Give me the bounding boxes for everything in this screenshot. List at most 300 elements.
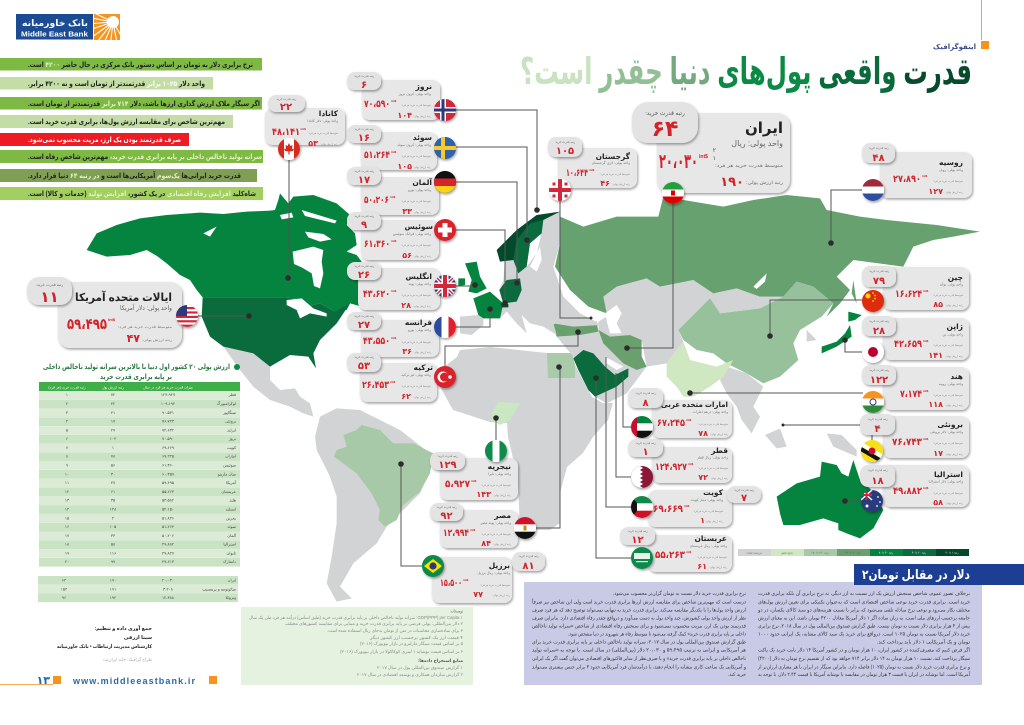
card: Germany: رتبه ارزش پولی: [413, 211, 432, 214]
table title [43, 363, 240, 381]
card: UAE: int$ [686, 418, 692, 422]
table: top 20 countries: ۱۸ [65, 542, 70, 547]
table: top 20 countries: ۵۲،۱۵۰ [162, 506, 174, 512]
card: Brunei: رتبه قدرت خرید: [867, 417, 888, 421]
map legend: بررسی نشده [746, 550, 762, 554]
card: Qatar: ۷۲ [698, 473, 708, 482]
table: top 20 countries: ایرلند [227, 427, 236, 432]
card: Kuwait [631, 486, 761, 527]
table: top 20 countries: ۵۳،۵۸۲ [162, 498, 174, 503]
table: lower ranks: ۱۵۴ [61, 586, 67, 591]
card: Norway: ۷۰،۵۹۰ [364, 99, 390, 110]
table: lower ranks: ۳،۲۰۸ [163, 586, 174, 591]
card: Kuwait: واحد پولی: دینار کویت [691, 498, 723, 502]
card: Brazil: رتبه قدرت خرید: [518, 554, 539, 558]
card: Georgia: ۴۶ [600, 179, 610, 188]
table: top 20 countries: ۳۰ [111, 471, 115, 476]
card: Russia: ۲۷،۸۹۰ [893, 174, 921, 185]
card: Canada: کانادا [319, 109, 339, 118]
card: Kuwait: ۷ [741, 493, 747, 504]
card: Japan [862, 316, 969, 363]
card: Norway: رتبه ارزش پولی: [413, 115, 432, 118]
card: Turkey: ۶۲ [401, 392, 411, 401]
card: Iran [632, 102, 790, 204]
card: Qatar: واحد پولی: ریال قطر [696, 456, 728, 460]
table: lower ranks: ونزوئلا [225, 595, 236, 600]
card: United Kingdom: ۴۳،۶۲۰ [363, 289, 390, 300]
logo: Middle East Bank [16, 10, 126, 48]
table: top 20 countries: ۱۰ [65, 471, 69, 476]
flag: United Kingdom [434, 275, 456, 297]
table: top 20 countries: ۳۵ [111, 498, 115, 503]
card: Egypt: رتبه ارزش پولی: [493, 543, 512, 546]
card: Canada: واحد پولی: دلار کانادا [307, 119, 338, 123]
card: Russia: متوسط قدرت خرید هر فرد: [933, 180, 964, 183]
map: Asia and Europe [552, 195, 980, 538]
text column: left: خرید کند. [728, 672, 746, 678]
table: top 20 countries: رتبه ارزش پول [102, 386, 124, 390]
card: Kuwait: رتبه قدرت خرید: [734, 488, 755, 492]
credits: طراح گرافیک: خانه ایران‌نت [103, 656, 152, 662]
card: Nigeria: متوسط قدرت خرید هر فرد: [481, 484, 512, 487]
card: Egypt [430, 503, 536, 548]
card: Georgia: واحد پولی: لاری گرجستان [592, 160, 630, 165]
card: Egypt: متوسط قدرت خرید هر فرد: [481, 533, 512, 536]
table: top 20 countries: ۵۸ [111, 542, 116, 547]
card: Iran: ۱ [713, 156, 716, 162]
card: Sweden [347, 125, 456, 171]
card: Iran: ۲ [713, 148, 716, 154]
table: top 20 countries: هلند [229, 498, 236, 503]
card: Australia: int$ [923, 486, 929, 490]
card: Sweden: متوسط قدرت خرید هر فرد: [401, 155, 432, 158]
card: United Kingdom: واحد پولی: پوند [408, 282, 431, 286]
card: Norway: رتبه قدرت خرید: [354, 74, 375, 78]
map: Egypt [547, 353, 575, 378]
map legend: رتبه ۸۰ تا ۱۲۰ [845, 550, 862, 554]
card: China: ۷۹ [873, 276, 885, 287]
table: top 20 countries: ۱۲۴،۹۲۷ [161, 392, 176, 397]
card: India: هند [950, 372, 963, 381]
text column: right: جامعه برحسب ارزهای ملی است. به زبان ساده اگر ۱ دلار آمریکا معادل ۴۲۰۰ تومان باشد، این به معنای ارزش [758, 614, 970, 622]
card: China: int$ [923, 289, 929, 293]
card: Brunei [860, 414, 969, 462]
card: Saudi Arabia: رتبه قدرت خرید: [627, 529, 648, 533]
card: Norway: نروژ [415, 82, 432, 91]
card: UAE: رتبه ارزش پولی: [710, 433, 729, 436]
card: United Kingdom: متوسط قدرت خرید هر فرد: [401, 294, 432, 297]
table: top 20 countries: سنگاپور [222, 410, 237, 415]
card: China: واحد پولی: یوآن [940, 282, 963, 286]
card: India: رتبه ارزش پولی: [945, 404, 964, 407]
text column: left [531, 590, 747, 678]
card: Brunei: متوسط قدرت خرید هر فرد: [933, 442, 964, 445]
table: top 20 countries: ۵ [66, 427, 68, 432]
logo: Middle East Bank: بانک خاورمیانه [22, 18, 88, 29]
card: Russia: رتبه ارزش پولی: [945, 191, 964, 194]
credits: کارشناس مدیریت ارتباطات • بانک خاورمیانه [57, 644, 152, 650]
card: United States: رتبه ارزش پولی: [142, 338, 172, 342]
card: United Kingdom: ۲۶ [358, 270, 370, 281]
card: Switzerland: رتبه ارزش پولی: [413, 255, 432, 258]
card: Japan: رتبه قدرت خرید: [869, 319, 890, 323]
card: Brunei: رتبه ارزش پولی: [945, 453, 964, 456]
card: Egypt: int$ [470, 528, 476, 532]
table: top 20 countries: سان مارینو [217, 471, 237, 476]
card: Switzerland: ۶۱،۳۶۰ [364, 239, 390, 250]
card: Brazil: برزیل [489, 561, 510, 570]
notes panel: ۴ قیمت ارز یک کشور برحسب ارز کشور دیگر [369, 635, 464, 640]
card: Saudi Arabia: int$ [686, 550, 692, 554]
card: Brunei: ۱۷ [933, 449, 943, 458]
table: top 20 countries: سوئد [227, 524, 237, 529]
flag: Nigeria [485, 440, 507, 462]
card: United States: واحد پولی: دلار آمریکا [120, 303, 172, 312]
table: lower ranks: ۹۶ [62, 595, 66, 600]
card: Germany: رتبه قدرت خرید: [354, 169, 375, 173]
text column: right: خرید دلار آمریکا نسبت به تومان ۱۰۲۵ است. درواقع برای خرید یک سبد کالای مشابه، یک ایرانی حدود ۱۰۰۰ [758, 630, 970, 638]
card: Canada [265, 95, 345, 160]
card: Saudi Arabia [620, 527, 732, 572]
card: Russia: ۴۸ [872, 153, 885, 164]
text column: left: قدرتمند بودن یک ارز، مزیت محسوب نمی‌شود و برای سنجش رفاه اقتصادی از شاخص «سرانه تولید ناخالص [532, 624, 747, 630]
table: top 20 countries: برونئی [225, 419, 236, 424]
card: Nigeria: واحد پولی: نایرا [488, 472, 511, 476]
connector lines [187, 110, 873, 566]
key messages bars: مهم‌ترین شاخص برای مقایسه ارزش پول‌ها، برابری قدرت خرید است. [28, 119, 225, 126]
text column: left: نرخ برابری قدرت خرید دلار نسبت به تومان گران‌تر محسوب می‌شود. [613, 590, 746, 597]
map: Africa [438, 347, 613, 530]
card: India: واحد پولی: روپیه [939, 382, 963, 386]
table: top 20 countries: ۵۹،۴۹۵ [162, 480, 174, 485]
card: Saudi Arabia: عربستان [694, 534, 727, 543]
decorative top rule [981, 0, 982, 40]
card: Japan: رتبه ارزش پولی: [945, 355, 964, 358]
table: top 20 countries: لوکزامبورگ [217, 401, 236, 406]
logo: Middle East Bank: Middle East Bank [21, 32, 88, 38]
card: Russia: واحد پولی: روبل [939, 168, 963, 172]
text column: left: داخلی بر پایه برابری قدرت خرید» کمک گرفته می‌شود تا متوسط رفاه هر شهروند در دنیا مشخص شود. [568, 630, 746, 638]
card: Qatar: ۱۲۴،۹۲۷ [655, 462, 687, 473]
flag: Switzerland [434, 219, 456, 241]
flag: Turkey [434, 366, 456, 388]
table: top 20 countries: ۷۸ [111, 454, 116, 459]
card: Germany [347, 167, 456, 216]
card: Saudi Arabia: واحد پولی: ریال عربستان [690, 544, 727, 548]
card: Australia: استرالیا [934, 470, 963, 479]
notes panel [241, 607, 473, 685]
card: United Kingdom: رتبه ارزش پولی: [413, 305, 432, 308]
text column: left: نظر از ارزش واحد پولی کشورش، چند واحد پول به دست می‌آورد و درواقع چقدر رفاه اقتصادی دارد. بنابراین صرف [532, 614, 746, 622]
table: top 20 countries: ۴۲ [111, 401, 115, 406]
text column: right: و نرخ برابری قدرت خرید دلار نسبت به تومان (۱۰۲۵) فاصله دارد. بنابراین سیگار در ایران با هر معیاری ارزان‌تر از [757, 664, 971, 670]
card: China: متوسط قدرت خرید هر فرد: [933, 294, 964, 297]
table: top 20 countries: ۶۹،۶۶۹ [162, 445, 174, 450]
table: top 20 countries: نروژ [228, 436, 236, 441]
card: Egypt: ۹۲ [440, 511, 453, 522]
card: Brunei: برونئی [937, 420, 963, 429]
text column: right: برخلاف تصور عموم، شاخص سنجش ارزش یک ارز نسبت به ارز دیگر، نه نرخ برابری آن بلکه برابری قدرت [758, 590, 970, 597]
card: Sweden: واحد پولی: کرون سوئد [397, 143, 431, 147]
card: Norway: متوسط قدرت خرید هر فرد: [401, 104, 432, 107]
table: top 20 countries: ۳۳ [111, 533, 116, 538]
card: Japan: int$ [923, 339, 929, 343]
card: Sweden: ۱۰۵ [397, 162, 412, 171]
card: India [862, 365, 969, 414]
table: top 20 countries: ۷۲ [111, 392, 115, 397]
card: China: چین [948, 273, 963, 282]
table: lower ranks [38, 576, 238, 602]
table: top 20 countries: ۷۰،۵۹۰ [162, 436, 174, 441]
table: top 20 countries: ۴۷ [111, 480, 116, 485]
card: France: ۳۶ [402, 347, 412, 356]
card: UAE: ۸ [642, 398, 649, 409]
table: lower ranks: ۶۴ [62, 578, 66, 582]
footer [0, 675, 217, 687]
card: Russia: روسیه [939, 158, 963, 167]
card: Nigeria: رتبه قدرت خرید: [437, 454, 458, 458]
table: top 20 countries: کویت [227, 445, 236, 450]
card: Germany: ۳۳ [402, 207, 412, 216]
table: top 20 countries: ۲ [66, 401, 68, 406]
key messages bars [0, 58, 263, 200]
card: Turkey: ۵۳ [358, 361, 370, 372]
notes panel: ۳ برای ساده‌سازی محاسبات در متن از تومان به‌جای ریال استفاده شده است. [327, 628, 464, 633]
card: UAE: واحد پولی: درهم امارات [692, 410, 728, 414]
text column: right: مختلف بکار می‌رود و نوعی نرخ مبادله تلقی می‌شود که برابر با نسبت هزینه‌های دو سبد کالای یکسان، در دو [757, 608, 970, 614]
card: UAE: رتبه قدرت خرید: [635, 391, 656, 395]
key messages bars: نرخ برابری دلار به تومان بر اساس دستور بانک مرکزی در حال حاضر ۴۲۰۰ است. [28, 61, 253, 69]
card: Sweden: سوئد [413, 133, 432, 142]
card: Georgia: int$ [589, 168, 595, 172]
card: Egypt: ۱۲،۹۹۴ [443, 528, 469, 539]
table: top 20 countries: رتبه قدرت خرید (هر فرد) [48, 386, 86, 390]
card: Brazil: ۱۵،۵۰۰ [440, 578, 462, 589]
card: Sweden: رتبه ارزش پولی: [413, 166, 432, 169]
table: top 20 countries: ۵۶ [111, 462, 115, 468]
table: top 20 countries: ۴۹،۶۱۳ [162, 559, 175, 564]
flag: Japan [862, 341, 884, 363]
table: top 20 countries: ۶ [66, 436, 68, 441]
text column: right: سیگار پرداخت کند، نسبت ۱۰ هزار تومان به ۱۴ دلار برابر ۷۱۴ خواهد بود که از تقسیم نرخ تومان به دلار (۴۲۰۰) [758, 655, 970, 662]
table: top 20 countries: ۶۱،۳۶۰ [162, 462, 174, 468]
flag: Iran [662, 182, 684, 204]
card: Australia: ۵۸ [933, 498, 943, 507]
table: lower ranks: سائوتومه و پرینسیپ [202, 586, 237, 591]
flag: Kuwait [631, 496, 653, 518]
card: UAE: ۷۸ [698, 429, 708, 438]
card: Norway: ۱۰۴ [397, 111, 412, 120]
card: Iran: int$ [699, 154, 708, 160]
table: top 20 countries: ۵۰،۲۰۶ [162, 533, 174, 538]
panel heading: دلار در مقابل تومان۲ [862, 567, 970, 582]
text column: right [757, 590, 971, 678]
table: top 20 countries: ۱۴۸ [110, 506, 117, 512]
table: top 20 countries: عربستان [221, 489, 236, 494]
card: Germany: ۵۰،۲۰۶ [364, 195, 389, 206]
card: United Kingdom: ۲۸ [401, 301, 411, 310]
table: top 20 countries: ۱۳ [65, 498, 70, 503]
table: top 20 countries: ۵۱،۲۶۴ [162, 524, 174, 529]
table: top 20 countries: میزان قدرت خرید هر فرد در سال [143, 386, 193, 390]
text column: right: اگر فرض کنیم که مصرف‌کننده در کشور ایران، ۱۰ هزار تومان و در کشور آمریکا ۱۴ دلار بابت خرید یک پاکت [758, 646, 970, 654]
card: Switzerland: متوسط قدرت خرید هر فرد: [401, 244, 432, 247]
card: Qatar: int$ [688, 462, 694, 466]
card: Nigeria [430, 440, 518, 500]
flag: Qatar [631, 466, 653, 488]
notes panel: ۲ دلار بین‌المللی: پولی فرضی بر پایه برابری قدرت خرید و مبنایی برای مقایسه کشورهای مختلف [285, 621, 464, 626]
flag: Australia [861, 490, 883, 512]
table: top 20 countries: ۲۷ [111, 427, 116, 432]
table title: بر پایه برابری قدرت خرید [100, 374, 172, 381]
table: top 20 countries: ۱۷ [111, 419, 116, 424]
table: lower ranks: ۱۲،۳۸۸ [162, 595, 175, 600]
card: Turkey: متوسط قدرت خرید هر فرد: [401, 385, 432, 388]
table: top 20 countries: ۹ [66, 462, 68, 468]
card: Georgia: ۱۰۵ [556, 146, 574, 157]
card: Brazil: ۷۷ [473, 590, 483, 599]
card: Canada: ۴۸،۱۴۱ [272, 127, 300, 138]
text column: left: ارزش واحد پول‌ها را با یکدیگر مقایسه می‌کند. برابری قدرت خرید به تنهایی نمی‌تواند توضیح دهد که هر فرد صرف [532, 606, 746, 614]
card: France: واحد پولی: یورو [407, 328, 431, 332]
card: Switzerland: ۹ [361, 220, 367, 231]
card: Japan: ژاپن [947, 322, 963, 331]
flag: Canada [278, 138, 300, 160]
card: Saudi Arabia: ۱۲ [631, 535, 644, 546]
text column: right: آمریکا است. اما نوشابه در ایران با قیمت ۳ هزار تومان در مقایسه با نوشابه آمریکا با قیمت ۲.۴۴ دلار، با توجه به [758, 671, 971, 678]
card: Turkey: ۲۶،۴۵۳ [362, 380, 389, 391]
card: Japan: ۱۴۱ [928, 351, 943, 360]
card: France: فرانسه [405, 318, 432, 327]
card: Norway: واحد پولی: کرون نروژ [398, 92, 431, 96]
map: Nigeria [492, 402, 520, 425]
table: top 20 countries: استرالیا [223, 542, 236, 547]
card: Switzerland: واحد پولی: فرانک سوئیس [393, 232, 431, 236]
card: Egypt: مصر [493, 511, 511, 520]
text column: right: خرید است. برابری قدرت خرید نوعی شاخص اقتصادی است که به‌عنوان تکنیکی برای تعیین ارزش پول‌های [758, 600, 970, 606]
card: Kuwait: متوسط قدرت خرید هر فرد: [693, 510, 724, 513]
key messages bars: شاه‌کلید افزایش رفاه اقتصادی در یک کشور، افزایش تولید (خدمات و کالا) است. [28, 190, 256, 198]
table: top 20 countries: ۷ [66, 445, 69, 450]
flag: Brunei [861, 440, 883, 462]
card: Sweden: ۵۱،۲۶۴ [364, 150, 390, 161]
card: India: ۱۱۸ [928, 400, 943, 409]
text column: left: و آمریکایی یک ساعت کاری مشابه را انجام دهند، با درآمدشان فرد آمریکایی حدود ۳ برابر جنس بیشتری می‌تواند [532, 664, 747, 670]
card: Georgia: رتبه ارزش پولی: [612, 183, 631, 186]
card: Switzerland: رتبه قدرت خرید: [354, 214, 375, 218]
card: Canada: ۵۳ [308, 139, 318, 148]
card: United Kingdom: رتبه قدرت خرید: [354, 264, 375, 268]
card: Nigeria: ۱۴۳ [476, 490, 491, 499]
card: Germany: متوسط قدرت خرید هر فرد: [401, 200, 432, 203]
flag: India [862, 391, 884, 414]
table: top 20 countries: بحرین [226, 515, 236, 520]
text column: right: بیش از ۴ هزار برابری دلار نسبت به تومان نیست. طبق گزارش صندوق بین‌المللی پول در سال ۲۰۱۸، نرخ برابری [758, 622, 970, 630]
card: Russia: رتبه قدرت خرید: [868, 146, 889, 150]
flag: France [434, 316, 456, 338]
card: Brazil: رتبه ارزش پولی: [492, 594, 511, 597]
card: Qatar: رتبه ارزش پولی: [710, 477, 729, 480]
card: India: ۱۲۲ [870, 375, 888, 386]
card: Brazil: متوسط قدرت خرید هر فرد: [480, 584, 511, 587]
table: top 20 countries: ۱۴ [65, 506, 69, 512]
table: top 20 countries: امارات [225, 454, 236, 459]
card: Nigeria: int$ [471, 479, 477, 483]
table: top 20 countries: آلمان [227, 533, 237, 538]
footer: ۱۳ [37, 675, 50, 687]
table: top 20 countries: آمریکا [226, 480, 237, 485]
card: United Kingdom [347, 262, 456, 310]
card: Switzerland [347, 212, 456, 260]
text column: left: درست است که مهم‌ترین شاخص برای مقایسه ارزش ارزها برابری قدرت خرید است ولی این شاخص نیز صرفاً [531, 597, 746, 606]
card: United States [27, 277, 198, 348]
flag: Saudi Arabia [631, 547, 653, 569]
card: Norway: int$ [391, 99, 397, 103]
card: India: متوسط قدرت خرید هر فرد: [933, 394, 964, 397]
card: Qatar: ۱ [642, 447, 649, 458]
map legend: بدون تغییر [780, 550, 793, 554]
card: Nigeria: ۱۲۹ [438, 460, 457, 471]
card: Japan: ۴۲،۶۵۹ [894, 339, 922, 350]
card: Canada: متوسط قدرت خرید هر فرد: [308, 132, 339, 135]
card: Georgia [548, 137, 637, 201]
table: lower ranks: ۱۹۲ [110, 595, 116, 600]
table: top 20 countries: ۶۰،۳۵۹ [162, 471, 174, 476]
card: Switzerland: سوئیس [404, 222, 433, 231]
table: top 20 countries: ۱۶ [65, 524, 69, 529]
table: top 20 countries: ۹۹ [111, 559, 115, 564]
card: Georgia: ۱۰،۶۴۴ [566, 168, 588, 179]
table: top 20 countries: ۴ [112, 515, 114, 520]
card: United States: int$ [108, 317, 116, 322]
card: Brunei: ۷۶،۷۴۳ [892, 437, 922, 448]
map legend [738, 549, 969, 556]
card: United States: ایالات متحده آمریکا [75, 290, 172, 304]
card: United Kingdom: int$ [391, 289, 397, 293]
card: China: رتبه قدرت خرید: [869, 269, 890, 273]
flag: United States [176, 305, 198, 327]
table: top 20 countries: ۶۷،۲۴۵ [162, 454, 174, 459]
notes panel: ۵ بر اساس قیمت سیگار مارلبرو در بازار نیویورک (۲۰۱۶) [360, 641, 464, 646]
card: Japan: واحد پولی: ین [942, 332, 963, 336]
card: Iran: واحد پولی: ریال [731, 139, 783, 148]
card: Qatar [628, 439, 732, 488]
table: lower ranks: ۲۰،۰۳۰ [162, 578, 174, 582]
table: top 20 countries: تایوان [226, 550, 236, 555]
card: Iran: متوسط قدرت خرید هر فرد: [715, 163, 784, 168]
notes panel: منابع استخراج داده‌ها: [418, 658, 463, 663]
panel heading [854, 564, 1024, 585]
card: Australia [860, 465, 969, 512]
card: Norway: ۶ [361, 80, 367, 91]
map legend: رتبه ۱۲۰ تا ۱۸۰ [811, 550, 829, 554]
card: Brunei: واحد پولی: دلار برونئی [930, 430, 963, 434]
card: Egypt: واحد پولی: پوند مصر [479, 521, 511, 525]
card: UAE: ۶۷،۲۴۵ [657, 418, 685, 429]
table: top 20 countries: ۱ [112, 445, 114, 450]
table: lower ranks: ۱۹۱ [110, 586, 116, 591]
flag: China [862, 290, 884, 312]
card: Turkey: int$ [390, 380, 396, 384]
card: Brazil: واحد پولی: ریال برزیل [477, 571, 510, 575]
card: UAE: امارات متحده عربی [661, 400, 728, 409]
card: France: int$ [391, 336, 397, 340]
card: Nigeria: ۵،۹۲۷ [445, 479, 470, 490]
card: Brunei: int$ [923, 437, 929, 441]
table: lower ranks: ۱۹۰ [110, 578, 116, 582]
table: top 20 countries: ایسلند [226, 506, 236, 512]
text column: left: طبق گزارش صندوق بین‌المللی پول در سال ۲۰۱۷، سرانه تولید ناخالص داخلی بر پایه برابری قدرت خرید برای [532, 638, 746, 646]
